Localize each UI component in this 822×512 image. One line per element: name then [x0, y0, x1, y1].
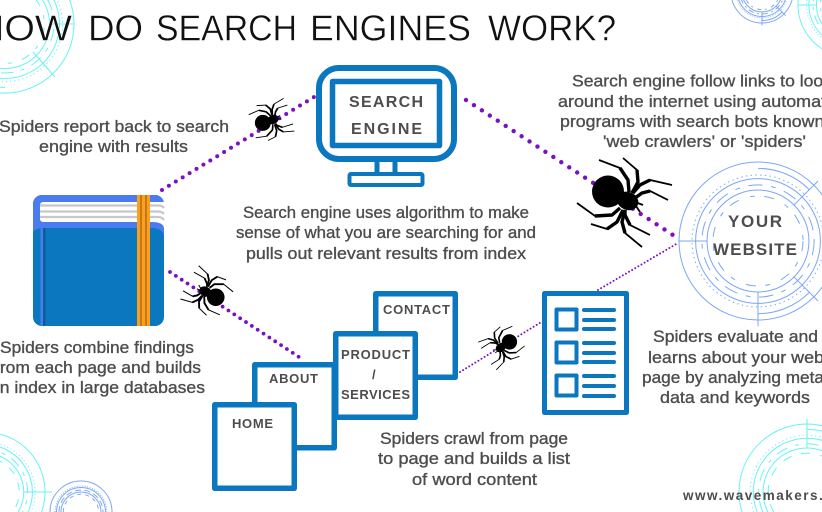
- icon: about page: [255, 365, 334, 448]
- arrow: thin dotted line pages to document: [460, 321, 543, 372]
- text: spiders crawl: [378, 429, 570, 489]
- text: spiders crawl: to page and builds a list: [378, 449, 570, 468]
- icon: monitor labelled search engine: ENGINE: [351, 121, 422, 138]
- icon: product and services page: PRODUCT: [341, 347, 410, 362]
- text: spiders evaluate: Spiders evaluate and: [653, 327, 818, 346]
- icon: your website circle: [679, 162, 822, 326]
- title: SEARCH: [156, 8, 297, 48]
- icon: contact page: [376, 294, 455, 377]
- text: search engine algorithm: pulls out relevant results from index: [246, 244, 527, 263]
- text: search engine follows links: 'web crawlers' or 'spiders': [603, 132, 806, 151]
- icon: spider near monitor: [240, 89, 305, 154]
- icon: product and services page: /: [372, 367, 376, 382]
- icon: product and services page: [336, 334, 415, 417]
- icon: book index: [33, 195, 164, 326]
- arrow: dotted line monitor to website: [466, 100, 673, 235]
- title: WORK?: [488, 8, 616, 48]
- text: spiders combine findings: from each page and builds: [0, 358, 201, 377]
- decoration: cyan rings top right: [798, 0, 822, 61]
- title: ENGINES: [310, 8, 471, 48]
- icon: home page: [215, 405, 294, 488]
- text: search engine follows links: [558, 72, 822, 151]
- text: spiders crawl: Spiders crawl from page: [380, 429, 568, 448]
- decoration: cyan rings top left: [0, 0, 74, 93]
- text: spiders evaluate: learns about your web: [648, 348, 822, 367]
- text: spiders combine findings: [0, 338, 205, 397]
- icon: spider near document: [471, 315, 531, 376]
- decoration: cyan rings bottom left: [0, 432, 52, 512]
- decoration: blue rings top right: [731, 0, 793, 25]
- arrow: thin dotted line document to website: [598, 243, 678, 290]
- icon: about page: ABOUT: [269, 371, 318, 386]
- icon: monitor labelled search engine: [319, 68, 454, 185]
- icon: document with word list: [544, 294, 626, 412]
- icon: monitor labelled search engine: SEARCH: [349, 94, 423, 111]
- icon: home page: HOME: [232, 416, 273, 431]
- title: DO: [88, 8, 143, 48]
- icon: your website circle: YOUR: [728, 212, 782, 231]
- text: spiders evaluate: page by analyzing meta: [642, 368, 822, 387]
- icon: contact page: CONTACT: [383, 302, 450, 317]
- icon: large spider: [577, 158, 672, 247]
- text: spiders evaluate: [642, 327, 822, 407]
- title: [0, 8, 616, 48]
- decoration: cyan rings bottom right: [739, 419, 822, 512]
- icon: your website circle: WEBSITE: [713, 240, 797, 259]
- text: spiders evaluate: data and keywords: [660, 388, 810, 407]
- arrow: dotted line book to monitor: [162, 97, 314, 190]
- text: search engine algorithm: Search engine uses algorithm to make: [243, 203, 529, 222]
- decoration: blue rings bottom left: [50, 481, 112, 512]
- icon: product and services page: SERVICES: [341, 387, 410, 402]
- text: spiders combine findings: Spiders combine findings: [0, 338, 194, 357]
- arrow: dotted line pages to book: [170, 272, 299, 357]
- text: search engine follows links: Search engine follow links to look: [572, 72, 822, 90]
- text: spiders report back: [0, 117, 229, 156]
- text: search engine algorithm: sense of what you are searching for and: [236, 223, 536, 242]
- text: spiders crawl: of word content: [412, 470, 537, 489]
- text: spiders report back: engine with results: [39, 137, 188, 156]
- text: search engine algorithm: [236, 203, 536, 263]
- icon: spider near book: [180, 265, 234, 317]
- text: spiders report back: Spiders report back to search: [0, 117, 229, 136]
